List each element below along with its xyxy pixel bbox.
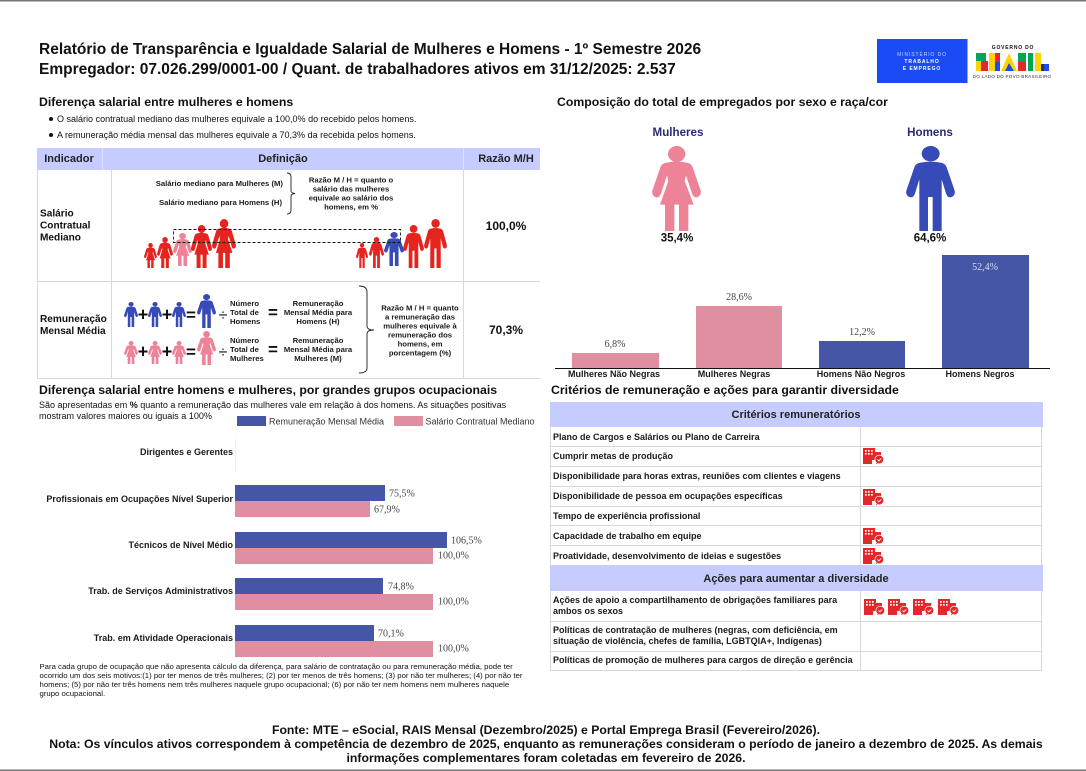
formula: homens: Mensal Média para xyxy=(284,308,353,317)
criteria rows: Tempo de experiência profissional xyxy=(553,511,700,521)
title: Empregador: 07.026.299/0001-00 / Quant. de trabalhadores ativos em 31/12/2025: 2.537 xyxy=(39,61,676,78)
bar chart: composição: Mulheres Negras xyxy=(698,369,770,379)
row label: salário contratual mediano: Mediano xyxy=(40,232,81,244)
dashed median box xyxy=(174,230,400,242)
bullet list xyxy=(49,114,416,140)
top rule xyxy=(0,0,1086,2)
bar chart: grupos ocupacionais: Trab. em Atividade Operacionais xyxy=(94,633,233,643)
formula: mulheres: = xyxy=(186,342,196,362)
action rows: situação de violência, chefes de família, LGBTQIA+, Indígenas) xyxy=(553,636,822,646)
bar chart: grupos ocupacionais xyxy=(46,439,482,657)
bottom rule xyxy=(0,770,1086,771)
formula: homens: Total de xyxy=(230,308,260,317)
definition text: salário mediano xyxy=(156,179,283,207)
bar chart: composição xyxy=(555,255,1050,379)
heading: diferença salarial: Diferença salarial entre mulheres e homens xyxy=(39,95,293,109)
action rows: Ações de apoio a compartilhamento de obrigações familiares para xyxy=(553,595,838,605)
definition text: razão média: homens, em xyxy=(398,340,443,348)
panel: tabela de indicadores xyxy=(37,148,540,378)
footnote: ocorrido um dos seis motivos:(1) por ter menos de três mulheres; (2) por ter menos de três homens; (3) por não ter mulheres; (4) por não ter xyxy=(40,671,523,680)
figure: homens: 64,6% xyxy=(914,232,946,244)
definition text: razão mediano xyxy=(309,176,393,212)
criteria rows: Disponibilidade para horas extras, reuniões com clientes e viagens xyxy=(553,471,841,481)
icon: empresa capacidade xyxy=(863,528,884,544)
formula: mulheres: Remuneração xyxy=(293,336,344,345)
row label: remuneração mensal média: Remuneração xyxy=(40,314,107,325)
logo: Governo do Brasil xyxy=(973,45,1052,79)
definition text: razão média: mulheres equivale à xyxy=(383,322,457,330)
table header: Indicador xyxy=(44,153,94,165)
footnote: Para cada grupo de ocupação que não apresenta cálculo da diferença, para salário de contratação ou para remuneração média, pode ter xyxy=(40,662,513,671)
action rows: Políticas de contratação de mulheres (negras, com deficiência, em xyxy=(553,625,838,635)
formula: homens: Homens xyxy=(230,317,260,326)
figure: homens xyxy=(906,126,955,244)
value: 70,3%: 70,3% xyxy=(489,323,523,337)
action rows: ambos os sexos xyxy=(553,606,623,616)
footnote: grupo ocupacional. xyxy=(40,689,105,698)
legend xyxy=(237,416,535,426)
figure: homens: Homens xyxy=(907,126,953,139)
formula: mulheres xyxy=(124,331,353,365)
logo: Ministério do Trabalho e Emprego xyxy=(877,39,968,83)
table header: Definição xyxy=(258,153,308,165)
bar chart: composição: 28,6% xyxy=(726,292,752,303)
icon: empresa disponibilidade xyxy=(863,489,884,505)
formula: mulheres: + xyxy=(138,342,148,362)
footer: fonte e nota xyxy=(49,723,1043,765)
logo: Ministério do Trabalho e Emprego: E EMPREGO xyxy=(903,66,941,72)
header: ações diversidade: Ações para aumentar a diversidade xyxy=(703,573,889,585)
bar chart: composição: 12,2% xyxy=(849,327,875,338)
title: Relatório de Transparência e Igualdade Salarial de Mulheres e Homens - 1º Semestre 2026 xyxy=(39,41,701,58)
formula: mulheres: Número xyxy=(230,336,259,345)
formula: homens: = xyxy=(186,306,196,324)
action rows: Políticas de promoção de mulheres para cargos de direção e gerência xyxy=(553,655,854,665)
footer: fonte e nota: Nota: Os vínculos ativos correspondem à competência de dezembro de 2025, enquanto as remunerações consideram o período de janeiro a dezembro de 2025. As demais xyxy=(49,737,1043,751)
formula: mulheres: Mulheres (M) xyxy=(294,354,342,363)
heading: composição: Composição do total de empregados por sexo e raça/cor xyxy=(557,95,888,109)
bullet list: O salário contratual mediano das mulheres equivale a 100,0% do recebido pelos homens. xyxy=(57,114,416,124)
definition text: razão mediano: homens, em % xyxy=(324,202,378,212)
criteria rows: Plano de Cargos e Salários ou Plano de Carreira xyxy=(553,432,761,442)
formula: mulheres: = xyxy=(268,340,278,359)
row label: salário contratual mediano: Contratual xyxy=(40,220,91,232)
definition text: razão média: a remuneração das xyxy=(385,312,455,322)
bar chart: composição: Homens Não Negros xyxy=(817,369,905,379)
formula: homens: Remuneração xyxy=(293,299,344,308)
formula: mulheres: + xyxy=(162,342,172,362)
bar chart: grupos ocupacionais: Trab. de Serviços Administrativos xyxy=(88,586,233,596)
logo: Ministério do Trabalho e Emprego: MINISTÉRIO DO xyxy=(897,51,947,58)
intro text: São apresentadas em % quanto a remuneração das mulheres vale em relação à dos homens. As situações positivas xyxy=(39,400,507,410)
row label: salário contratual mediano xyxy=(40,208,91,244)
criteria rows: Disponibilidade de pessoa em ocupações específicas xyxy=(553,491,783,501)
logo: Ministério do Trabalho e Emprego: TRABALHO xyxy=(904,59,940,65)
bar chart: grupos ocupacionais: 70,1% xyxy=(378,628,404,640)
definition text: razão média xyxy=(381,304,459,358)
formula: mulheres: ÷ xyxy=(219,344,228,361)
icons: ações de apoio xyxy=(864,599,959,615)
criteria rows: Cumprir metas de produção xyxy=(553,451,674,461)
formula: homens: ÷ xyxy=(219,307,228,324)
formula: homens: = xyxy=(268,303,278,322)
footer: fonte e nota: informações complementares foram coletadas em fevereiro de 2026. xyxy=(347,751,745,765)
bar chart: grupos ocupacionais: 75,5% xyxy=(389,488,415,500)
definition text: razão mediano: equivale ao salário dos xyxy=(309,194,393,202)
figure: mulheres xyxy=(652,126,703,244)
header: ações diversidade xyxy=(550,565,1043,591)
bar chart: composição: Homens Negros xyxy=(945,369,1015,379)
bar chart: grupos ocupacionais: 74,8% xyxy=(388,582,414,592)
row label: remuneração mensal média: Mensal Média xyxy=(40,326,106,337)
panel: tabela de critérios xyxy=(550,402,1043,670)
bar chart: grupos ocupacionais: 106,5% xyxy=(451,536,482,546)
formula: homens: Homens (H) xyxy=(296,317,340,326)
header: critérios remuneratórios: Critérios remuneratórios xyxy=(732,409,860,421)
logo: Governo do Brasil: DO LADO DO POVO BRASILEIRO xyxy=(973,74,1052,79)
formula: homens: Número xyxy=(230,299,259,308)
bar chart: composição: Mulheres Não Negras xyxy=(568,369,660,379)
bar chart: grupos ocupacionais: Profissionais em Ocupações Nível Superior xyxy=(46,494,233,504)
footnote: homens; (5) por não ter três homens nem três mulheres naquele grupo ocupacional; (6) por não ter nem homens nem mulheres naquele xyxy=(40,680,509,689)
bar chart: grupos ocupacionais: 100,0% xyxy=(438,644,469,654)
logo: Governo do Brasil: GOVERNO DO xyxy=(992,45,1034,51)
definition text: razão média: remuneração dos xyxy=(388,330,452,340)
brace xyxy=(287,173,295,214)
definition text: salário mediano: Salário mediano para Homens (H) xyxy=(159,198,282,207)
table header xyxy=(37,148,540,170)
criteria rows: Capacidade de trabalho em equipe xyxy=(553,531,702,541)
action rows xyxy=(553,595,854,665)
formula: mulheres: Mulheres xyxy=(230,354,264,363)
figure: mulheres: Mulheres xyxy=(653,126,703,139)
figure: mulheres: 35,4% xyxy=(661,232,693,244)
heading: grupos ocupacionais: Diferença salarial entre homens e mulheres, por grandes grupos ocupacionais xyxy=(39,383,497,397)
definition text: razão mediano: Razão M / H = quanto o xyxy=(309,176,393,184)
bar chart: grupos ocupacionais: Dirigentes e Gerentes xyxy=(140,447,233,457)
formula: homens: + xyxy=(138,304,148,324)
heading: critérios: Critérios de remuneração e ações para garantir diversidade xyxy=(551,383,899,397)
people: homens por salário xyxy=(356,219,447,268)
intro text: mostram valores maiores ou iguais a 100% xyxy=(39,411,212,421)
formula: mulheres: Mensal Média para xyxy=(284,345,353,354)
people: mulheres por salário xyxy=(144,219,236,268)
criteria rows xyxy=(553,432,841,561)
bar chart: composição: 6,8% xyxy=(605,339,625,350)
row label: salário contratual mediano: Salário xyxy=(40,208,74,220)
header: critérios remuneratórios xyxy=(550,402,1043,427)
formula: homens xyxy=(124,294,353,328)
formula: homens: + xyxy=(162,304,172,324)
definition text: razão média: Razão M / H = quanto xyxy=(381,304,459,312)
table header: Razão M/H xyxy=(478,153,534,165)
bar chart: grupos ocupacionais: Técnicos de Nível Médio xyxy=(128,540,233,550)
definition text: razão mediano: salário das mulheres xyxy=(313,184,389,194)
bar chart: grupos ocupacionais: 67,9% xyxy=(374,504,400,516)
definition text: razão média: porcentagem (%) xyxy=(389,348,452,358)
legend: Salário Contratual Mediano xyxy=(426,416,535,426)
bar chart: grupos ocupacionais: 100,0% xyxy=(438,596,469,608)
intro text xyxy=(39,400,507,421)
bar chart: grupos ocupacionais: 100,0% xyxy=(438,550,469,562)
criteria rows: Proatividade, desenvolvimento de ideias e sugestões xyxy=(553,551,781,561)
title xyxy=(39,41,701,78)
big brace xyxy=(359,286,374,373)
value: 100,0%: 100,0% xyxy=(486,219,527,233)
formula: mulheres: Total de xyxy=(230,345,260,354)
row label: remuneração mensal média xyxy=(40,314,107,337)
definition text: salário mediano: Salário mediano para Mulheres (M) xyxy=(156,179,283,188)
footnote xyxy=(40,662,523,698)
legend: Remuneração Mensal Média xyxy=(269,416,384,426)
icon: empresa cumpre metas xyxy=(863,448,884,464)
bullet list: A remuneração média mensal das mulheres equivale a 70,3% da recebida pelos homens. xyxy=(57,130,416,140)
icon: empresa proatividade xyxy=(863,548,884,564)
bar chart: composição: 52,4% xyxy=(972,262,998,273)
footer: fonte e nota: Fonte: MTE – eSocial, RAIS Mensal (Dezembro/2025) e Portal Emprega Brasil (Fevereiro/2026). xyxy=(272,723,820,737)
